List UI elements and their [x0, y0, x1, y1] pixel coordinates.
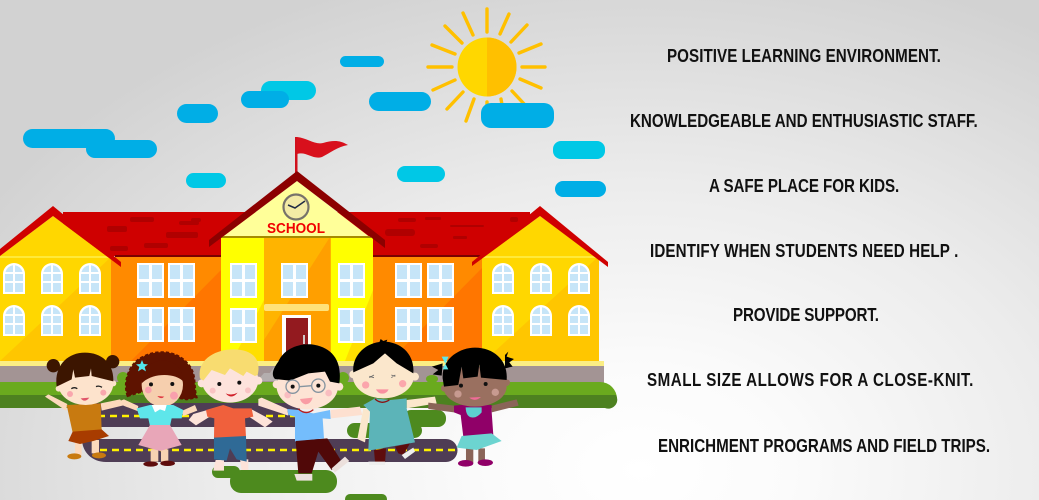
- middle wings: [63, 212, 530, 361]
- center block: [209, 171, 385, 361]
- sun: [428, 9, 545, 121]
- road: [82, 403, 458, 462]
- child 5: girl in teal dress: [349, 339, 437, 465]
- item 6: SMALL SIZE ALLOWS FOR A CLOSE-KNIT.: [647, 370, 973, 390]
- item 5: PROVIDE SUPPORT.: [733, 305, 879, 325]
- item 7: ENRICHMENT PROGRAMS AND FIELD TRIPS.: [658, 436, 990, 456]
- flag: [295, 137, 348, 173]
- ground: base and grass: [0, 361, 617, 409]
- child 4: boy with glasses: [258, 344, 362, 481]
- left wing: [0, 206, 121, 361]
- child 3: blond boy: [189, 349, 273, 471]
- school building: [0, 137, 617, 409]
- child 6: girl in purple dress: [428, 348, 519, 467]
- item 1: POSITIVE LEARNING ENVIRONMENT.: [667, 46, 941, 66]
- grass patches: [212, 410, 446, 500]
- item 3: A SAFE PLACE FOR KIDS.: [709, 176, 899, 196]
- clouds: [23, 56, 606, 197]
- school sign: SCHOOL: [267, 221, 325, 237]
- child 1: girl in orange: [45, 353, 125, 459]
- item 2: KNOWLEDGEABLE AND ENTHUSIASTIC STAFF.: [630, 111, 978, 131]
- windows: [3, 263, 590, 343]
- text list: [630, 46, 990, 456]
- child 2: girl with curly hair: [121, 352, 197, 467]
- item 4: IDENTIFY WHEN STUDENTS NEED HELP .: [650, 241, 958, 261]
- right wing: [472, 206, 608, 363]
- clock: [284, 194, 308, 220]
- entrance: [264, 304, 329, 365]
